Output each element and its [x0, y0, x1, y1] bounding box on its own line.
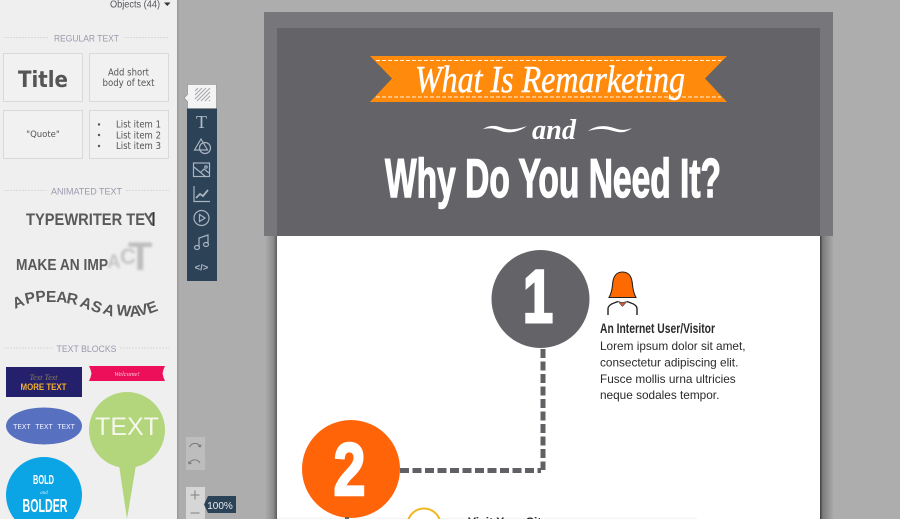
block: blue circle bold: BOLD [33, 472, 54, 487]
page shadow left [265, 236, 277, 519]
block: blue circle bold: BOLDER [22, 496, 68, 516]
appear as a wave: A [101, 301, 117, 321]
active tool: background [184, 84, 216, 108]
block: blue circle bold: and [40, 491, 48, 496]
zoom level label [204, 496, 236, 513]
make an impact: MAKE AN IMP [16, 257, 108, 274]
card: title [4, 54, 82, 102]
appear as a wave: E [145, 298, 160, 318]
step 1 body text: Fusce mollis urna ultricies [600, 372, 736, 386]
block: more text [6, 367, 82, 397]
appear as a wave: A [10, 293, 27, 313]
heading: regular text: REGULAR TEXT [54, 34, 119, 44]
block: more text: MORE TEXT [20, 382, 67, 393]
header band [277, 28, 820, 236]
tool: code: </> [195, 262, 209, 274]
card: title: Title [18, 68, 68, 93]
step 2 circle [302, 420, 400, 518]
dashed connector vertical [540, 349, 546, 470]
title: what is remarketing: What Is Remarketing [415, 59, 685, 101]
appear as a wave: P [35, 288, 47, 306]
block: green pin [89, 392, 165, 519]
zoom level label: 100% [207, 501, 233, 512]
card: quote: "Quote" [26, 130, 60, 140]
card: list [90, 110, 168, 158]
step 1 circle [492, 250, 590, 348]
step 1 body text [600, 339, 746, 402]
tool: shapes [194, 139, 210, 154]
infographic page [264, 12, 833, 519]
typewriter text: TYPEWRITER TE [26, 210, 145, 229]
make an impact: A [107, 252, 121, 273]
block: blue ellipse [6, 408, 82, 444]
bottom edge fade [277, 517, 697, 519]
appear as a wave: E [46, 289, 56, 306]
icon: internet user [608, 272, 637, 315]
page shadow right [820, 236, 834, 519]
make an impact [16, 235, 152, 279]
card: list: List item 2 [116, 130, 161, 142]
card: list: List item 3 [116, 141, 161, 152]
make an impact: T [128, 235, 152, 279]
block: green pin: TEXT [95, 413, 159, 441]
vertical tool bar [184, 84, 217, 281]
block: welcome ribbon: Welcome! [114, 371, 140, 378]
appear as a wave: V [136, 301, 151, 320]
appear as a wave: A [129, 303, 142, 321]
appear as a wave: P [23, 289, 37, 308]
appear as a wave: S [89, 298, 104, 317]
card: list: List item 1 [116, 120, 161, 130]
connector stub [345, 517, 349, 519]
block: blue ellipse: TEXT TEXT TEXT [13, 424, 75, 432]
word: and: and [532, 114, 576, 146]
card: short body text [90, 54, 168, 102]
tool: video [194, 210, 209, 226]
icon: yellow ring [408, 508, 440, 519]
block: more text: Text Text [29, 373, 58, 382]
heading: animated text: ANIMATED TEXT [51, 186, 122, 198]
card: quote [4, 110, 82, 158]
make an impact: C [120, 244, 136, 269]
step 1 body text: consectetur adipiscing elit. [600, 356, 738, 370]
appear as a wave [10, 288, 160, 321]
left sidebar panel [0, 0, 178, 519]
card: short body text: Add short [108, 68, 149, 78]
undo redo buttons [186, 437, 205, 470]
step 1 body text: Lorem ipsum dolor sit amet, [600, 339, 746, 353]
card: short body text: body of text [102, 78, 155, 89]
tool: music [194, 235, 208, 250]
zoom buttons [186, 487, 205, 519]
tool: chart [194, 186, 210, 202]
appear as a wave: A [78, 294, 94, 314]
step 1 heading: An Internet User/Visitor [600, 320, 715, 336]
dashed connector horizontal [400, 468, 541, 473]
orange ribbon [370, 56, 727, 102]
step 1 body text: neque sodales tempor. [600, 388, 719, 402]
heading: text blocks: TEXT BLOCKS [56, 344, 116, 355]
header band outer selection [264, 12, 833, 236]
block: blue circle bold [6, 457, 82, 519]
appear as a wave: W [116, 302, 132, 321]
tool: image [194, 163, 210, 177]
flourish right [588, 126, 632, 132]
appear as a wave: A [56, 289, 68, 307]
block: welcome ribbon [89, 366, 165, 381]
appear as a wave: R [65, 290, 79, 309]
step 1 circle: 1 [523, 255, 553, 338]
step 2 circle: 2 [334, 428, 366, 511]
tool: text: T [196, 112, 207, 132]
flourish left [483, 126, 527, 132]
